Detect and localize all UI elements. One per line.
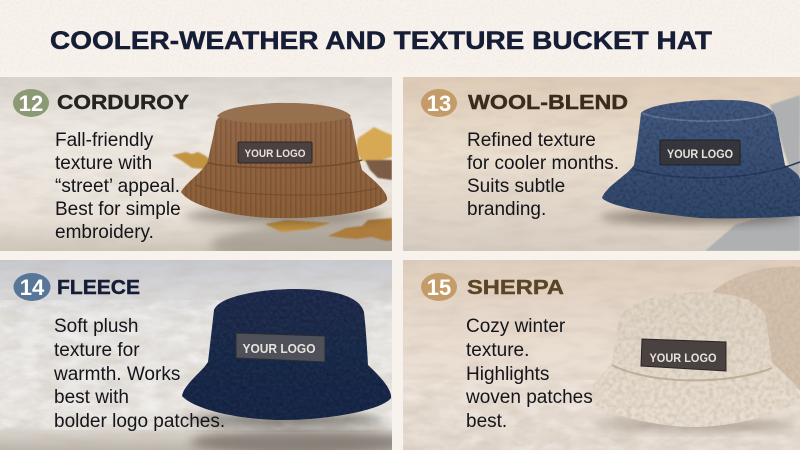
body text: “street’ appeal. [55, 176, 180, 197]
panel background [0, 260, 392, 450]
badge 14 [14, 273, 50, 301]
logo patch [236, 333, 325, 362]
body text: best with [54, 387, 129, 408]
body text: for cooler months. [467, 153, 619, 174]
logo patch [641, 339, 726, 371]
body text: bolder logo patches. [54, 411, 225, 432]
heading: FLEECE [57, 277, 140, 299]
hat: navy fleece [182, 289, 391, 420]
body text: branding. [467, 199, 546, 220]
panel: sherpa [403, 260, 800, 450]
panel: wool-blend [403, 77, 800, 251]
badge 14: 14 [20, 275, 45, 300]
sherpa blanket [712, 266, 800, 390]
body text: Fall-friendly [55, 130, 154, 151]
logo patch: YOUR LOGO [242, 341, 316, 356]
body text: Cozy winter [466, 316, 566, 337]
logo patch: YOUR LOGO [244, 148, 306, 160]
logo patch: YOUR LOGO [667, 149, 733, 161]
icon: autumn leaves [172, 127, 392, 241]
heading: SHERPA [467, 277, 564, 299]
logo patch [660, 140, 740, 165]
body text: best. [466, 411, 507, 432]
hat: blue wool [602, 100, 800, 218]
logo patch [238, 142, 312, 163]
badge 12: 12 [19, 91, 43, 116]
panel background [403, 77, 800, 251]
body text: woven patches [465, 387, 593, 408]
body text: texture for [54, 340, 140, 361]
heading: WOOL-BLEND [468, 92, 628, 114]
body text: Best for simple [55, 199, 181, 220]
body text: texture. [466, 340, 529, 361]
heading: CORDUROY [57, 92, 190, 114]
panel: fleece [0, 260, 410, 450]
badge 13 [421, 89, 457, 117]
title: COOLER-WEATHER AND TEXTURE BUCKET HAT [50, 27, 712, 55]
badge 15 [421, 273, 457, 301]
badge 12 [13, 89, 49, 117]
badge 15: 15 [427, 275, 451, 300]
body text: Soft plush [54, 316, 138, 337]
grey blanket [705, 95, 800, 251]
logo patch: YOUR LOGO [650, 351, 716, 365]
panel background [403, 260, 800, 450]
body text: Highlights [466, 364, 549, 385]
body text: Refined texture [467, 130, 596, 151]
body text: texture with [55, 153, 152, 174]
body text: Suits subtle [467, 176, 565, 197]
hat: brown corduroy [181, 103, 387, 218]
badge 13: 13 [427, 91, 451, 116]
panel background [0, 77, 392, 251]
body text: embroidery. [55, 222, 154, 243]
panel: corduroy [0, 77, 392, 251]
body text: warmth. Works [53, 364, 180, 385]
hat: cream sherpa [585, 292, 800, 427]
